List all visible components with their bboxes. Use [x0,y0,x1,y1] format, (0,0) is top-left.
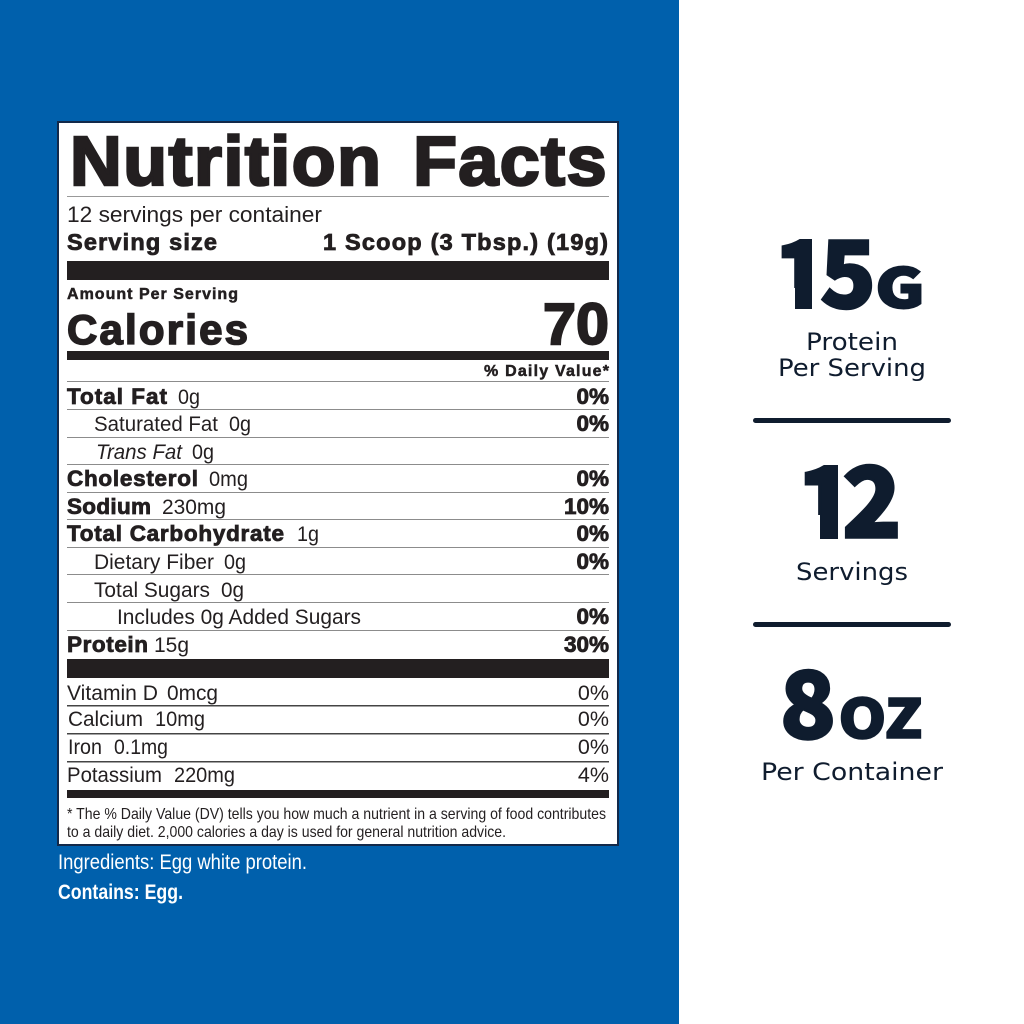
heading: Nutrition Facts: Nutrition Facts [70,122,608,200]
row: cholesterol [67,466,609,491]
row: vitamin d [67,681,609,705]
serving size: 1 Scoop (3 Tbsp.) (19g) [323,229,608,255]
amount per serving: Amount Per Serving [67,286,238,303]
stat: 15g protein per serving: 5 [820,202,876,334]
row: protein: Protein [67,632,148,657]
stat: 12 servings [798,464,907,585]
row: total fat: 0% [576,384,609,409]
blue background panel [0,0,679,1024]
stat: 12 servings: 2 [842,424,902,566]
stat: 15g protein per serving: G [876,244,924,324]
footnote [67,806,606,841]
row: total carbohydrate: 1g [297,522,319,546]
row: sodium: 10% [564,494,609,519]
row: total sugars: 0g [221,578,244,602]
stat: 8oz per container [761,632,943,786]
stat: 12 servings: Servings [796,558,908,586]
calories: 70 [543,292,609,357]
stat: 12 servings: 1 [796,424,856,566]
row: potassium [67,763,609,787]
row: potassium: 4% [578,763,609,787]
stat: 8oz per container: Per Container [761,758,943,786]
percent daily value header: % Daily Value* [484,363,610,380]
stat: 15g protein per serving: Protein [806,328,898,356]
row: dietary fiber: Dietary Fiber [94,550,214,574]
footnote: * The % Daily Value (DV) tells you how much a nutrient in a serving of food contributes [67,806,606,823]
footnote: to a daily diet. 2,000 calories a day is used for general nutrition advice. [67,824,506,841]
row: vitamin d: 0% [578,681,609,705]
row: calcium: 10mg [155,707,205,731]
stat: 15g protein per serving [780,239,924,381]
row: trans fat: Trans Fat [96,440,183,464]
stat: 15g protein per serving: 1 [774,202,830,334]
row: cholesterol: 0% [576,466,609,491]
row: protein: 15g [154,633,189,657]
row: vitamin d: Vitamin D [67,681,158,705]
row: potassium: Potassium [67,763,162,787]
row: added sugars: 0% [576,604,609,629]
row: saturated fat: Saturated Fat [94,412,218,436]
row: total carbohydrate: 0% [576,521,609,546]
row: iron: 0% [578,735,609,759]
serving size [67,229,608,255]
row: trans fat: 0g [192,440,214,464]
serving size: Serving size [67,229,217,255]
row: potassium: 220mg [174,763,235,787]
row: iron [68,735,609,759]
row: total fat [67,384,609,409]
row: sodium: 230mg [162,495,226,519]
row: sodium [67,494,609,519]
row: total sugars: Total Sugars [94,578,210,602]
row: total fat: Total Fat [67,384,168,409]
row: total carbohydrate: Total Carbohydrate [67,521,284,546]
row: iron: Iron [68,735,102,759]
row: calcium [68,707,609,731]
row: vitamin d: 0mcg [167,681,218,705]
row: cholesterol: 0mg [209,467,248,491]
calories: Calories [67,306,248,353]
stat: 15g protein per serving: Per Serving [778,354,926,382]
panel: nutrition facts label [58,122,618,845]
servings per container: 12 servings per container [67,202,322,227]
row: total carbohydrate [67,521,609,546]
allergen statement: Contains: Egg. [58,881,183,904]
row: added sugars [117,604,609,629]
row: calcium: Calcium [68,707,143,731]
row: total fat: 0g [178,385,200,409]
row: protein: 30% [564,632,609,657]
stat: 8oz per container: OZ [838,675,922,754]
row: protein [67,632,609,657]
row: cholesterol: Cholesterol [67,466,198,491]
row: iron: 0.1mg [114,735,168,759]
stat: 8oz per container: 8 [780,632,836,765]
row: saturated fat: 0g [229,412,251,436]
row: calcium: 0% [578,707,609,731]
ingredients: Ingredients: Egg white protein. [58,851,307,874]
row: dietary fiber [94,549,609,574]
row: saturated fat [94,411,609,436]
row: sodium: Sodium [67,494,151,519]
calories [67,292,609,357]
row: dietary fiber: 0g [224,550,246,574]
row: added sugars: Includes 0g Added Sugars [117,605,361,629]
row: saturated fat: 0% [576,411,609,436]
row: dietary fiber: 0% [576,549,609,574]
